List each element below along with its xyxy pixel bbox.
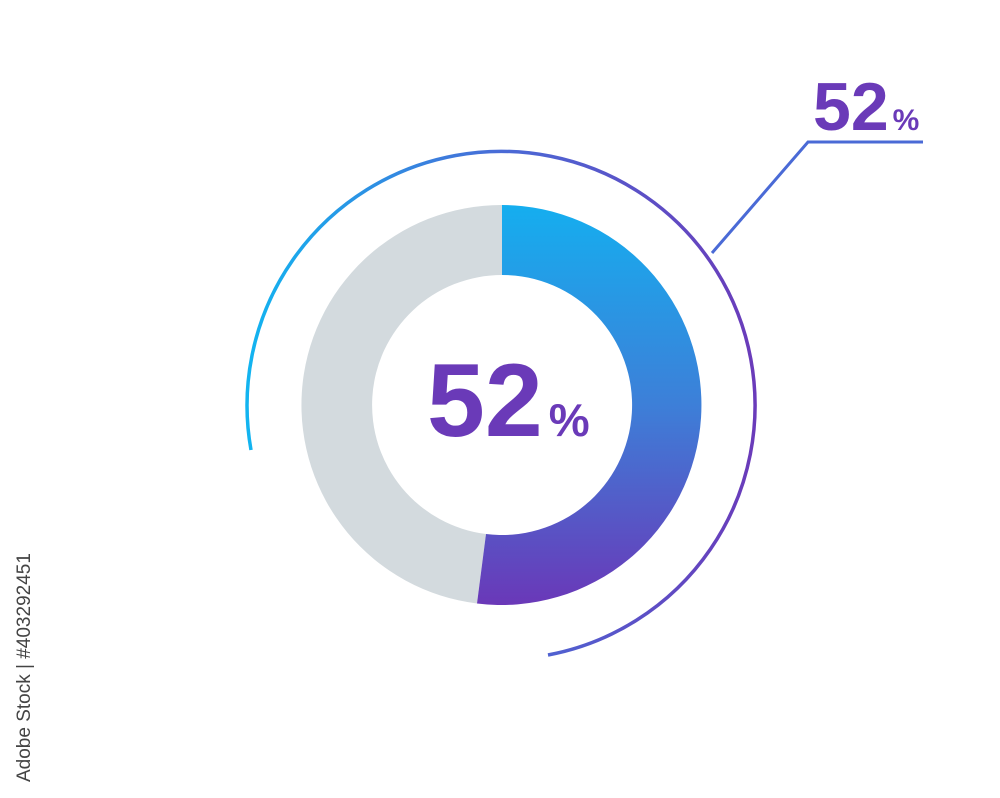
watermark id: Adobe Stock | #403292451 (14, 553, 35, 782)
gray remainder segment (301, 205, 502, 604)
callout label: 52% (813, 69, 919, 145)
outer arc (247, 151, 755, 655)
leader line (712, 142, 923, 253)
donut chart (301, 205, 701, 605)
center value: 52% (427, 343, 590, 459)
52% segment (477, 205, 701, 605)
